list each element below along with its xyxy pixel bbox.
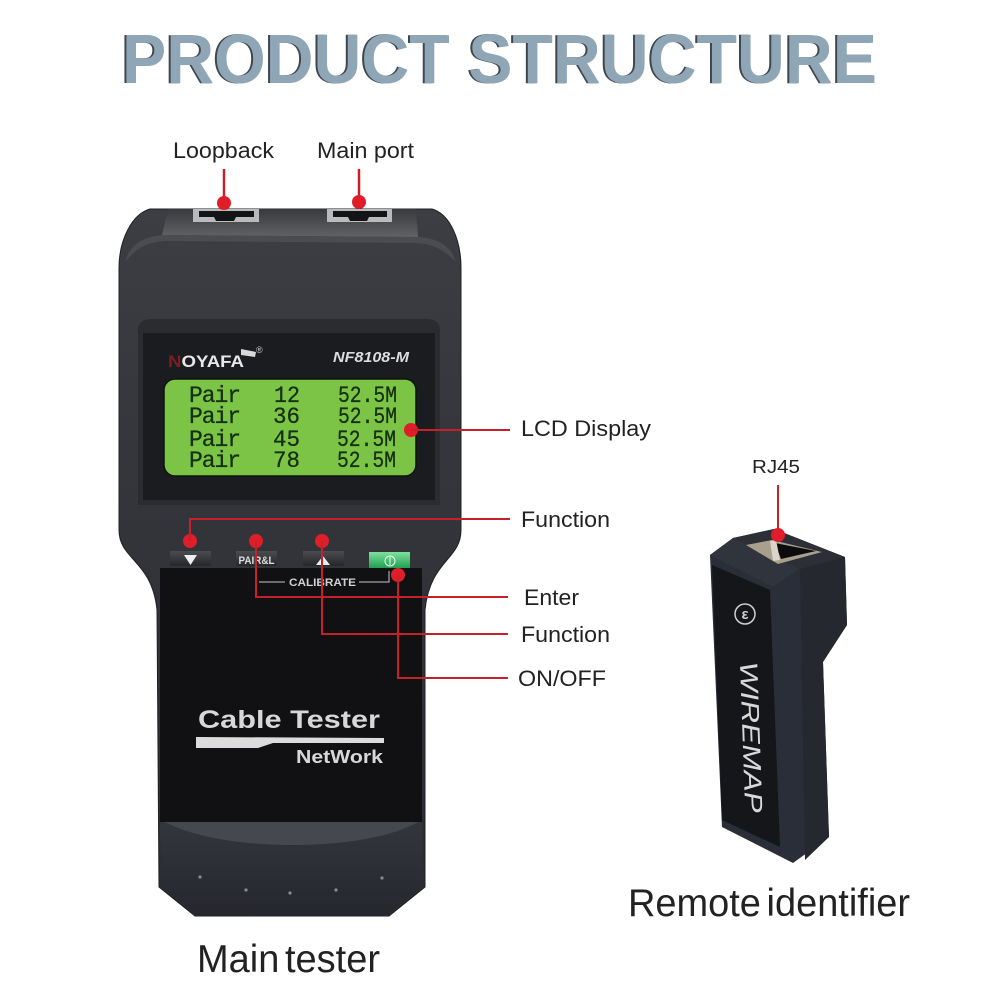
- caption: main tester: Main tester: [197, 938, 380, 981]
- callout: RJ45: RJ45: [752, 457, 800, 477]
- product label: cable tester: Cable Tester: [198, 706, 380, 734]
- remote logo: ε: [741, 606, 749, 623]
- callout: RJ45: [752, 457, 800, 542]
- callout: main port: Main port: [317, 138, 414, 163]
- LCD screen: Pair: [189, 427, 241, 453]
- LCD screen: 52.5M: [337, 427, 396, 453]
- device body: [119, 209, 461, 916]
- LCD screen: 45: [273, 427, 300, 453]
- calibrate label: CALIBRATE: [289, 577, 356, 589]
- remote top chamfer: [710, 538, 800, 587]
- remote identifier device: [710, 529, 847, 863]
- LCD screen: 52.5M: [338, 404, 397, 430]
- WIREMAP text: WIREMAP: [734, 661, 767, 814]
- callout: loopback: [173, 138, 275, 210]
- callout: LCD display: [404, 416, 651, 441]
- LCD screen: Pair: [189, 404, 241, 430]
- callout: LCD display: LCD Display: [521, 416, 651, 441]
- LCD screen: Pair: [189, 448, 241, 474]
- callout: function down: Function: [521, 507, 610, 532]
- callout: loopback: Loopback: [173, 138, 275, 163]
- brand logo: NOYAFA: [168, 352, 244, 371]
- callout: enter: Enter: [524, 585, 579, 610]
- LCD screen: 52.5M: [337, 448, 396, 474]
- LCD screen: 12: [274, 383, 300, 409]
- callout: main port: [317, 138, 414, 209]
- LCD screen: 36: [273, 404, 300, 430]
- title: PRODUCT STRUCTURE: [120, 20, 875, 98]
- remote front face: [712, 565, 780, 847]
- callout: enter: [249, 534, 579, 610]
- button: power: [369, 552, 410, 568]
- LCD screen: 52.5M: [338, 383, 397, 409]
- black lower panel: [160, 568, 422, 823]
- title: PRODUCT STRUCTURE: [122, 20, 877, 98]
- callout: function down: [183, 507, 610, 548]
- port: main: [327, 209, 392, 222]
- remote body: [710, 529, 847, 863]
- button: up: [303, 551, 344, 566]
- callout: function up: Function: [521, 622, 610, 647]
- caption: remote identifier: Remote identifier: [628, 882, 910, 925]
- bottom grip section: [160, 822, 422, 915]
- LCD screen: [164, 379, 416, 476]
- remote logo: [735, 604, 755, 624]
- brand logo: [168, 345, 263, 371]
- remote RJ45 jack: [733, 529, 845, 569]
- button: PAIR&L: [236, 551, 277, 567]
- brand logo: ®: [256, 345, 263, 355]
- callout: on/off: [391, 568, 606, 691]
- button: down: [170, 551, 211, 566]
- top connector panel: [125, 209, 456, 262]
- LCD screen: 78: [273, 448, 300, 474]
- LCD screen: Pair: [189, 383, 241, 409]
- callout: function up: [315, 534, 610, 647]
- product label: cable tester: NetWork: [296, 746, 384, 767]
- calibrate label: [259, 571, 389, 589]
- product label: cable tester: [196, 706, 384, 767]
- main tester device: [119, 209, 461, 916]
- button: PAIR&L: PAIR&L: [238, 555, 275, 567]
- port: loopback: [193, 209, 259, 222]
- model number: NF8108-M: [333, 350, 410, 366]
- remote side shading: [800, 557, 847, 860]
- callout: on/off: ON/OFF: [518, 666, 606, 691]
- LCD bezel: [138, 319, 440, 505]
